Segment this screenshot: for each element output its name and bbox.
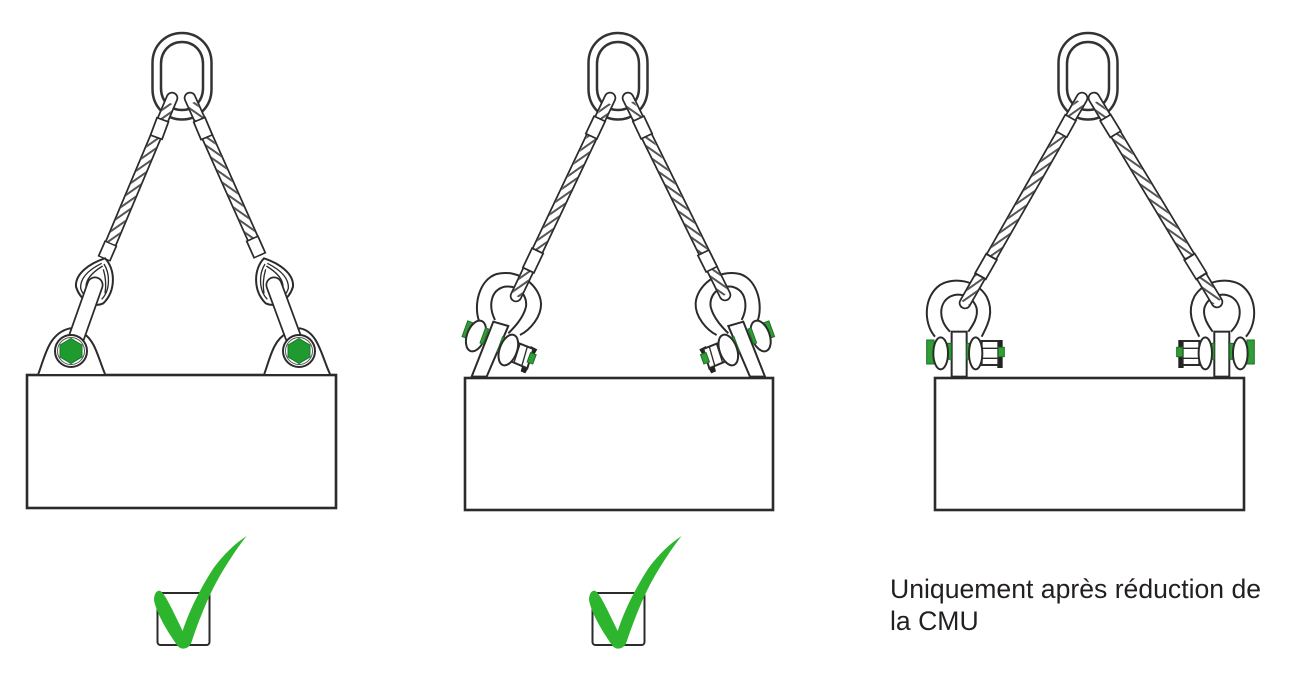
right sling leg xyxy=(628,98,725,295)
icon: check mark approved 1 xyxy=(154,536,247,649)
load box xyxy=(935,378,1244,510)
left shackle xyxy=(927,281,1004,377)
right sling leg xyxy=(1094,98,1217,302)
right bolt head xyxy=(283,335,315,367)
left thimble xyxy=(76,258,113,305)
icon: check mark approved 2 xyxy=(589,536,682,649)
master link xyxy=(152,33,212,120)
load box xyxy=(27,375,336,508)
right shackle xyxy=(1177,281,1254,377)
panel: thimble and lug sling xyxy=(27,33,336,508)
left sling leg xyxy=(516,98,610,296)
left sling leg xyxy=(965,98,1082,303)
load box xyxy=(465,378,773,510)
panel: angled shackle sling xyxy=(462,33,775,510)
text: condition note: la CMU xyxy=(890,606,979,636)
left shackle xyxy=(462,273,541,377)
left sling leg xyxy=(104,98,172,259)
right sling leg xyxy=(190,98,260,256)
right lifting lug xyxy=(264,328,330,374)
right pin xyxy=(274,285,298,350)
master link xyxy=(588,33,648,120)
left pin xyxy=(72,285,95,350)
right thimble xyxy=(256,258,293,305)
left bolt head xyxy=(55,335,87,367)
text: condition note: Uniquement après réduction de xyxy=(890,574,1261,604)
panel: vertical shackle sling xyxy=(927,33,1254,510)
right shackle xyxy=(696,273,775,377)
left lifting lug xyxy=(38,328,105,374)
master link xyxy=(1058,33,1118,120)
